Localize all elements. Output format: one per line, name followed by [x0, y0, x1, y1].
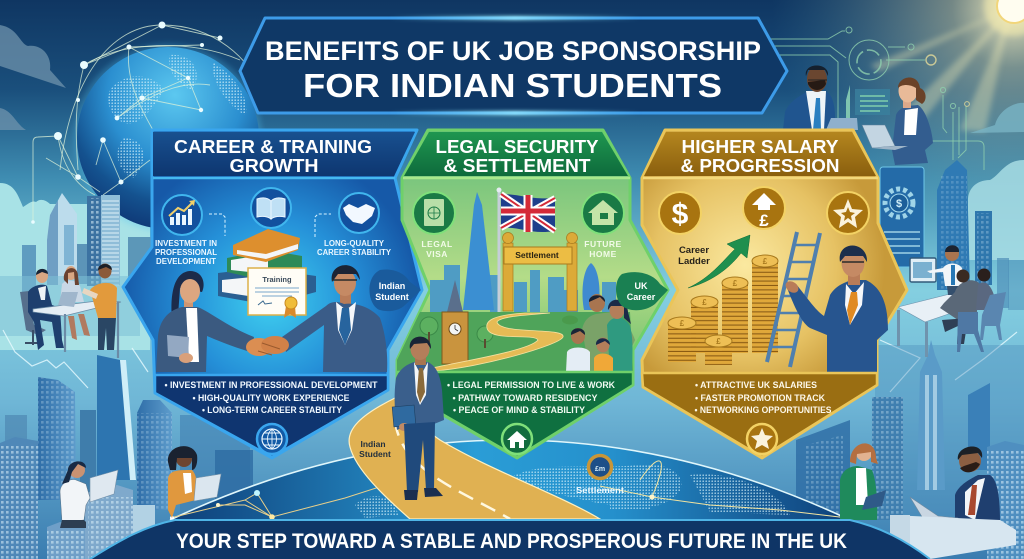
icon: home badge	[502, 424, 532, 454]
globe with network	[31, 22, 262, 232]
heading: higher salary and progression	[644, 132, 876, 176]
label: career ladder: Career	[679, 245, 709, 256]
woman with laptop top right	[862, 77, 933, 165]
illustration: family	[566, 294, 635, 372]
office woman orange jacket	[168, 446, 221, 518]
label: career ladder: Ladder	[678, 256, 710, 267]
illustration: settlement gate: Settlement	[515, 250, 559, 260]
label: long-quality career stability	[317, 239, 392, 257]
label: long-quality career stability: LONG-QUALITY	[324, 239, 385, 248]
bullet list band: salary	[642, 373, 877, 457]
bullet list band: salary: • FASTER PROMOTION TRACK	[695, 393, 825, 404]
background towers left	[0, 193, 152, 336]
arrow: growth	[688, 235, 750, 288]
skyline right	[796, 160, 1024, 559]
panel outline: gold	[642, 130, 907, 458]
bullet list band: salary: • NETWORKING OPPORTUNITIES	[694, 405, 832, 416]
footer banner: YOUR STEP TOWARD A STABLE AND PROSPEROUS FUTURE IN THE UK	[176, 530, 847, 553]
man top right	[783, 66, 858, 130]
heading: career and training growth: GROWTH	[230, 156, 318, 176]
title banner: BENEFITS OF UK JOB SPONSORSHIP	[265, 36, 761, 66]
label: future home: HOME	[589, 249, 617, 259]
standing man	[90, 283, 117, 318]
illustration: training certificate: Training	[262, 275, 292, 284]
label: legal visa: VISA	[426, 249, 448, 259]
ground	[397, 312, 633, 373]
panel: legal security and settlement	[397, 130, 668, 458]
dashboard panel right: $	[896, 198, 902, 210]
heading: higher salary and progression: HIGHER SALARY	[682, 137, 838, 157]
icon: house	[582, 192, 624, 234]
panel outline: blue	[123, 130, 422, 458]
pale cloud left	[0, 183, 150, 350]
divider below heading	[643, 177, 878, 179]
illustration: winding road	[432, 313, 563, 371]
panel: career and training growth	[123, 130, 422, 458]
icon: handshake	[339, 193, 379, 233]
icon: pound with arrow: £	[759, 211, 769, 230]
icon: passport	[413, 192, 455, 234]
clouds right	[968, 103, 1024, 260]
office team left	[20, 264, 121, 358]
badge: Indian Student	[369, 270, 421, 311]
illustration: Shard tower	[463, 192, 494, 310]
office woman lower left	[60, 461, 118, 528]
bullet list band: legal	[397, 372, 633, 457]
icon: growth chart	[162, 195, 202, 235]
faint network lines	[3, 330, 1017, 392]
figure: Indian student with backpack	[392, 337, 444, 500]
table with laptop	[33, 300, 121, 316]
bullet list band: career: • LONG-TERM CAREER STABILITY	[202, 405, 343, 416]
figure: businessman pointing at ladder	[783, 246, 888, 372]
office team right	[897, 245, 1006, 357]
bullet list band: career	[155, 375, 388, 457]
label: investment in professional development	[155, 239, 217, 266]
circuit lines top right	[768, 27, 984, 170]
badge: Indian Student: Student	[375, 292, 409, 302]
icon: open book	[251, 188, 291, 228]
icon: globe	[257, 424, 287, 454]
chair	[20, 291, 46, 335]
illustration: settlement gate	[502, 232, 578, 311]
document panel behind top pair	[846, 85, 890, 120]
label: long-quality career stability: CAREER STABILITY	[317, 248, 392, 257]
figure: woman shaking hands	[156, 271, 254, 372]
label: investment in professional development: DEVELOPMENT	[156, 257, 216, 266]
icon: star coin	[827, 192, 869, 234]
chart: coin stacks: £	[733, 279, 738, 288]
label: legal visa: LEGAL	[421, 239, 453, 249]
map globe arc	[170, 440, 850, 520]
marker: Settlement on map: Settlement	[576, 485, 624, 495]
label: future home	[584, 239, 622, 259]
dashboard panel right	[880, 167, 924, 267]
badge: Indian Student: Indian	[379, 281, 405, 291]
icon: dollar coin	[659, 192, 701, 234]
illustration: city skyline	[430, 265, 616, 312]
illustration: trees	[420, 316, 578, 348]
label: career ladder	[678, 245, 710, 267]
handshake	[246, 336, 289, 356]
illustration: Big Ben	[442, 280, 468, 364]
heading: higher salary and progression: & PROGRESSION	[680, 156, 840, 176]
title banner: FOR INDIAN STUDENTS	[303, 67, 722, 104]
man with laptop lower right	[890, 446, 1016, 559]
label: Indian Student on road: Indian	[360, 439, 386, 449]
woman with tablet lower right	[840, 443, 886, 520]
label: investment in professional development: INVESTMENT IN	[155, 239, 217, 248]
bullet list band: legal: • PEACE OF MIND & STABILITY	[453, 405, 586, 416]
figure: man shaking hands	[282, 265, 387, 372]
label: investment in professional development: PROFESSIONAL	[155, 248, 217, 257]
chart: coin stacks: £	[716, 337, 721, 346]
marker: Settlement on map: £m	[595, 466, 605, 473]
icon: sun with rays	[870, 0, 1024, 132]
illustration: UK flag with pole	[496, 188, 555, 312]
heading: career and training growth: CAREER & TRAINING	[174, 137, 372, 157]
footer banner	[90, 520, 930, 559]
seated man	[28, 285, 64, 350]
marker: Settlement on map	[576, 456, 624, 495]
panel outline: green	[397, 130, 668, 458]
label: future home: FUTURE	[584, 239, 622, 249]
badge: UK Career	[616, 272, 668, 310]
heading: legal security and settlement: & SETTLEMENT	[444, 156, 591, 176]
icon: dollar coin: $	[672, 198, 689, 231]
heading: career and training growth	[153, 132, 415, 176]
badge: UK Career: UK	[634, 281, 648, 291]
bullet list band: legal: • PATHWAY TOWARD RESIDENCY	[452, 393, 598, 404]
chart: coin stacks: £	[763, 257, 768, 266]
panel: higher salary and progression	[642, 130, 907, 458]
seated woman	[60, 280, 84, 302]
illustration: Gherkin tower	[582, 263, 600, 310]
icon: pound with arrow	[743, 187, 785, 230]
chart: coin stacks: £	[680, 319, 685, 328]
bullet list band: career: • HIGH-QUALITY WORK EXPERIENCE	[192, 393, 350, 404]
road	[349, 397, 600, 519]
clouds top left	[0, 25, 66, 130]
connector dashes	[209, 214, 331, 237]
badge: UK Career: Career	[627, 292, 656, 302]
chart: coin stacks: £	[702, 298, 707, 307]
icon: star badge	[747, 424, 777, 454]
label: Indian Student on road: Student	[359, 449, 391, 459]
bullet list band: legal: • LEGAL PERMISSION TO LIVE & WORK	[447, 380, 615, 391]
heading: legal security and settlement	[404, 132, 628, 176]
divider below heading	[403, 177, 630, 179]
illustration: ladder	[767, 232, 820, 367]
chart: coin stacks	[668, 255, 778, 365]
illustration: training certificate	[248, 268, 306, 318]
bullet list band: salary: • ATTRACTIVE UK SALARIES	[695, 380, 817, 391]
label: legal visa	[421, 239, 453, 259]
divider below heading	[153, 177, 395, 179]
skyline left	[0, 355, 253, 559]
illustration: stack of books	[218, 229, 316, 305]
bullet list band: career: • INVESTMENT IN PROFESSIONAL DEVELOPMENT	[164, 380, 378, 391]
heading: legal security and settlement: LEGAL SECURITY	[436, 137, 598, 157]
title banner	[240, 16, 787, 115]
label: Indian Student on road	[359, 439, 391, 459]
